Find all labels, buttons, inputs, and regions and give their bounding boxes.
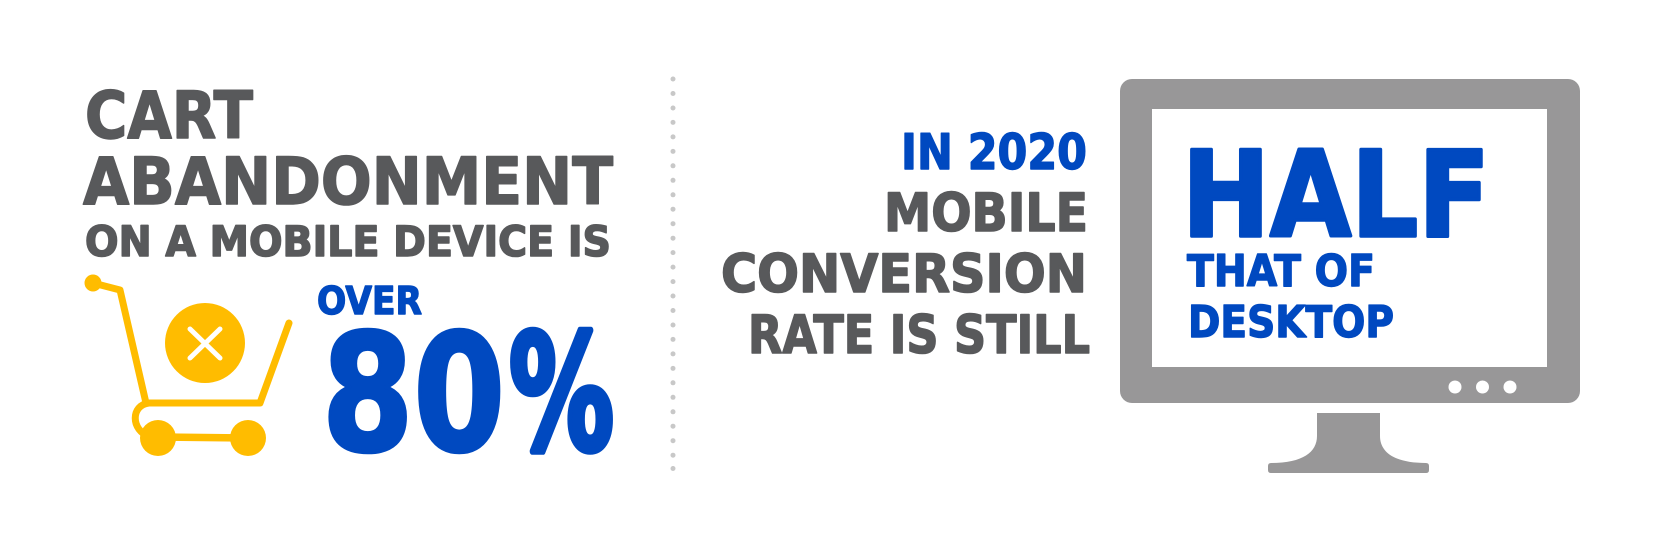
text: that of desktop	[1187, 246, 1394, 348]
icon: shopping cart with x	[84, 274, 289, 456]
stat: 80%: %	[509, 300, 614, 487]
monitor buttons	[1448, 380, 1516, 394]
divider dots	[670, 76, 676, 471]
text: mobile conversion rate is still: CONVERSION	[721, 244, 1087, 305]
panel: cart abandonment	[83, 79, 614, 489]
text: mobile conversion rate is still: RATE IS STILL	[748, 305, 1090, 366]
text: that of desktop: THAT OF	[1187, 246, 1375, 297]
monitor stand	[1268, 413, 1429, 473]
text: on a mobile device is: ON A MOBILE DEVICE IS	[85, 217, 611, 266]
text: that of desktop: DESKTOP	[1188, 297, 1394, 348]
heading: cart abandonment: CART	[85, 79, 253, 154]
text: in 2020: IN 2020	[901, 124, 1087, 181]
panel: mobile conversion	[721, 124, 1090, 366]
icon: desktop monitor	[1120, 79, 1580, 473]
text: over: OVER	[317, 279, 422, 323]
monitor screen	[1152, 109, 1547, 367]
heading: cart abandonment	[83, 79, 613, 220]
stat: 80%: 80	[322, 301, 505, 489]
heading: cart abandonment: ABANDONMENT	[83, 145, 613, 220]
text: mobile conversion rate is still	[721, 183, 1090, 366]
monitor frame	[1120, 79, 1580, 403]
stat: half: HALF	[1182, 127, 1490, 265]
text: mobile conversion rate is still: MOBILE	[884, 183, 1088, 244]
